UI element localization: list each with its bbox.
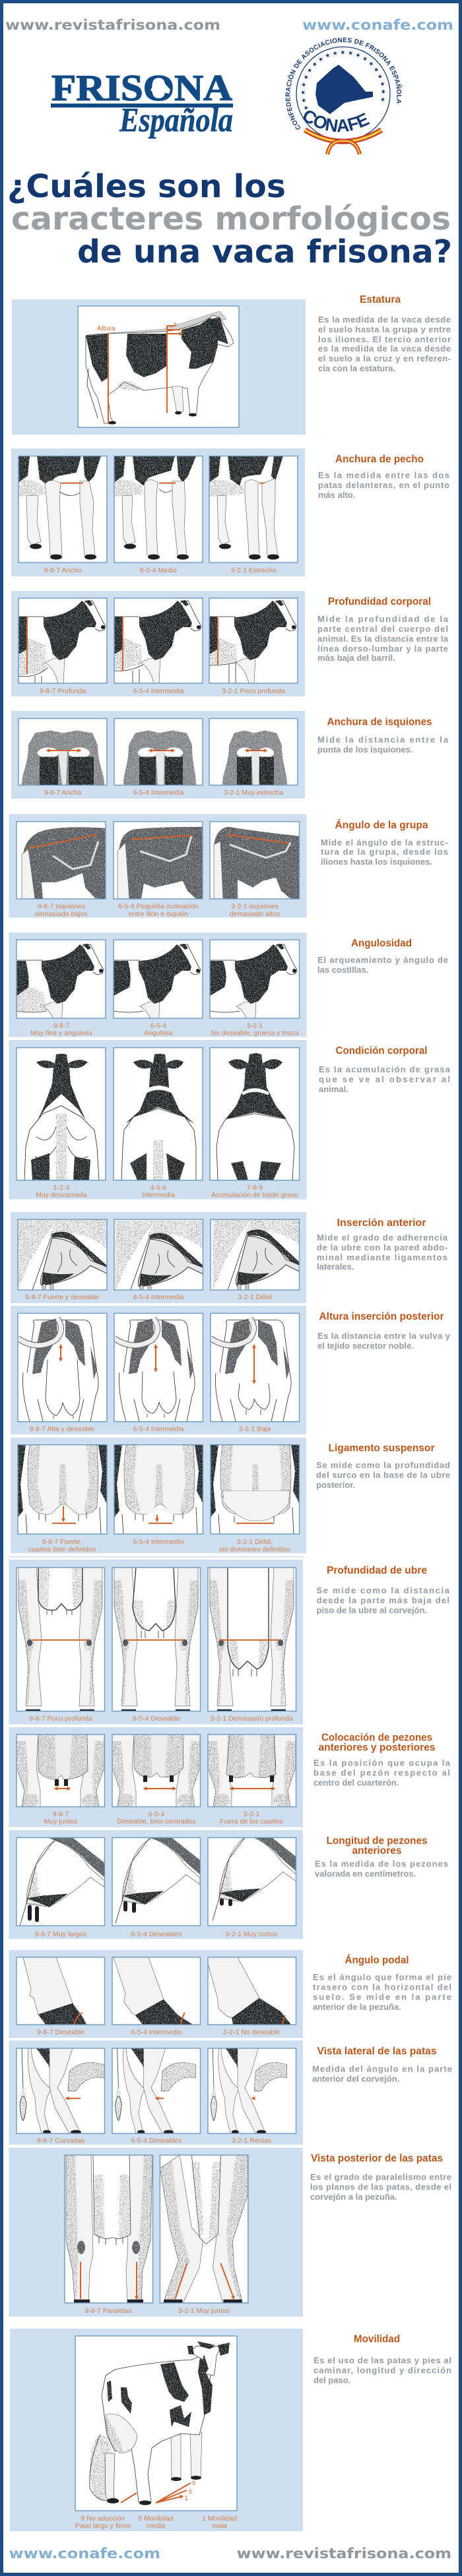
captions: 6-5-4 Pequeña inclinación — [118, 902, 199, 910]
captions: Muy juntos — [44, 1818, 77, 1825]
main title — [7, 168, 452, 270]
captions — [44, 789, 283, 797]
captions: Intermedia — [142, 1191, 175, 1199]
illustration: medio — [114, 456, 203, 563]
captions: Angulosa — [144, 1029, 173, 1037]
illustration: alta y deseable — [18, 1313, 107, 1422]
description: es la medida de la vaca desde — [318, 344, 451, 353]
illustration: estatura: 9 — [174, 322, 177, 328]
main title: ¿Cuáles son los — [7, 168, 286, 205]
heading: Profundidad de ubre — [327, 1565, 427, 1576]
heading: Anchura de isquiones — [327, 716, 432, 728]
captions — [35, 1930, 277, 1938]
captions: 5 Movilidad — [138, 2515, 174, 2523]
description: Se mide como la distancia — [317, 1585, 450, 1595]
captions: 3-2-1 Débil — [238, 1293, 272, 1301]
captions: 6-5-4 — [148, 1810, 164, 1818]
description: anterior del corvejón. — [312, 2073, 399, 2084]
illustration: fuerte y deseable — [18, 1219, 107, 1290]
logo: CONAFE: CONFEDERACIÓN DE ASOCIACIONES DE FRISONA ESPAÑOLA — [285, 38, 403, 129]
illustration: ancho — [18, 456, 107, 563]
heading: Ángulo de la grupa — [335, 818, 428, 831]
description: Es el uso de las patas y pies al — [314, 2356, 451, 2365]
illustration: pequeña inclinación — [114, 822, 203, 899]
heading: Inserción anterior — [337, 1217, 426, 1229]
description: el suelo hasta la grupa y entre — [318, 324, 451, 334]
description — [317, 735, 449, 754]
captions — [40, 687, 285, 695]
captions — [25, 1293, 272, 1301]
captions: sin divisiones definidas — [219, 1546, 290, 1554]
description: Es el grado de paralelismo entre — [310, 2172, 451, 2182]
heading: Ligamento suspensor — [329, 1443, 434, 1454]
captions: demasiado altos — [230, 910, 280, 918]
illustration: muy juntas — [160, 2155, 248, 2303]
description — [314, 2356, 451, 2385]
heading: Angulosidad — [351, 938, 412, 949]
heading — [326, 1835, 428, 1856]
illustration: deseables — [112, 1835, 201, 1926]
illustration: fuera de los cuartos — [208, 1734, 296, 1807]
captions: 6-5-4 Intermedia — [133, 1293, 184, 1301]
description: Se mide como la profundidad — [316, 1460, 450, 1470]
panel: Profundidad de ubre — [9, 1560, 450, 1725]
illustration: muy cortos — [208, 1832, 297, 1926]
illustration: baja — [211, 1313, 300, 1422]
description — [317, 1331, 451, 1351]
captions: Fuera de los cuartos — [220, 1818, 283, 1825]
description: suelo. Se mide en la parte — [313, 1992, 451, 2002]
captions: 9-8-7 Fuerte y deseable — [25, 1293, 99, 1301]
illustration: poco profunda — [209, 598, 298, 683]
header website: revista frisona: www.revistafrisona.com — [5, 17, 220, 33]
captions: 1-2-3 — [53, 1184, 69, 1192]
captions — [30, 1425, 271, 1433]
heading: anteriores — [352, 1845, 402, 1856]
description: las costillas. — [317, 965, 368, 975]
panel: Colocación de pezones — [9, 1727, 451, 1827]
description: Mide el grado de adherencia — [317, 1233, 448, 1242]
description: centro del cuarterón. — [314, 1778, 399, 1787]
captions: 3-2-1 Demasiado profunda — [211, 1715, 293, 1723]
illustration: cow walking — [75, 2336, 237, 2511]
captions: Muy fina y angulosa — [30, 1029, 92, 1037]
panel: Vista posterior de las patas — [9, 2148, 451, 2317]
panel: Vista lateral de las patas — [9, 2040, 452, 2145]
description: que se ve al observar al — [319, 1074, 450, 1084]
illustration: ancha — [18, 719, 107, 785]
illustration: deseable — [112, 1568, 201, 1711]
captions: 3-2-1 isquiones — [231, 902, 279, 910]
panel: Anchura de pecho — [11, 448, 449, 576]
illustration: intermedia — [114, 1219, 205, 1291]
logo: CONAFE: CONAFE — [304, 111, 370, 132]
description: el suelo a la cruz y en referen- — [318, 353, 451, 363]
description: Es la posición que ocupa la — [314, 1758, 451, 1767]
illustration: muy fina y angulosa — [16, 940, 106, 1027]
captions: 6-5-4 Intermedio — [131, 2029, 182, 2037]
heading — [318, 1732, 436, 1753]
captions: 3-2-1 Estrecho — [231, 567, 277, 574]
description: más baja del barril. — [317, 653, 395, 663]
panel: Ángulo podal — [9, 1950, 451, 2038]
captions: 9-8-7 Curvadas — [37, 2137, 84, 2145]
captions: 9-8-7 — [53, 1810, 69, 1818]
description: laterales. — [317, 1262, 354, 1272]
captions: 3-2-1 Muy estrecha — [224, 789, 283, 797]
illustration: intermedia — [114, 1048, 203, 1181]
description: los planos de las patas, desde el — [310, 2182, 451, 2192]
captions: 6-5-4 Medio — [140, 567, 177, 574]
panel: Inserción anterior — [11, 1212, 448, 1303]
illustration: intermedio — [112, 1957, 201, 2025]
captions: 6-5-4 Deseable — [133, 1715, 180, 1723]
description: el tejido secretor noble. — [317, 1341, 414, 1351]
panel: Altura inserción posterior — [11, 1306, 451, 1434]
illustration: intermedio — [114, 1445, 203, 1535]
description: Es la distancia entre la vulva y — [317, 1331, 451, 1341]
captions — [30, 1022, 299, 1037]
captions — [44, 567, 277, 574]
description — [321, 838, 448, 867]
captions — [37, 2137, 271, 2145]
heading: Colocación de pezones — [321, 1732, 432, 1744]
description: Es la medida entre las dos — [318, 470, 449, 480]
illustration: estatura: Altura — [97, 324, 116, 332]
illustration: deseable — [112, 1734, 201, 1807]
captions: 3-2-1 Poco profunda — [222, 687, 285, 695]
captions: 9-8-7 Paralelas — [84, 2307, 132, 2315]
illustration: isquiones bajos — [16, 822, 106, 899]
description: iliones hasta los isquiones. — [321, 857, 432, 867]
panel: Movilidad — [10, 2329, 451, 2531]
panel: Estatura — [12, 294, 451, 435]
captions: Paso largo y firme — [75, 2522, 131, 2530]
illustration: angulosa — [114, 940, 203, 1027]
captions: 3-2-1 Débil, — [237, 1538, 273, 1546]
panel: Angulosidad — [9, 933, 448, 1037]
heading: Profundidad corporal — [328, 596, 431, 607]
heading: Movilidad — [354, 2333, 400, 2345]
description: Es la acumulación de grasa — [319, 1064, 451, 1074]
description — [310, 2172, 451, 2201]
captions — [36, 1184, 298, 1199]
captions — [28, 1538, 290, 1554]
captions — [37, 2029, 280, 2037]
footer website: conafe: www.conafe.com — [9, 2546, 160, 2561]
description: anterior de la pezuña. — [313, 2002, 401, 2011]
heading: Anchura de pecho — [335, 454, 424, 465]
description: corvejón a la pezuña. — [310, 2192, 397, 2201]
illustration: gruesa y tosca — [210, 940, 300, 1027]
description — [316, 1460, 450, 1490]
captions — [84, 2307, 230, 2315]
illustration: rectas — [208, 2048, 296, 2134]
description: base del pezón respecto al — [314, 1767, 450, 1778]
logo: Frisona Española — [51, 68, 233, 139]
description: Es la medida de los pezones — [315, 1858, 448, 1869]
description: animal. — [319, 1084, 348, 1094]
captions: 9-8-7 Profunda — [40, 687, 86, 695]
captions: 3-2-1 — [247, 1022, 263, 1030]
panel: Longitud de pezones — [9, 1830, 448, 1939]
illustration: poco profunda — [16, 1568, 104, 1711]
description: caminar, longitud y dirección — [314, 2365, 451, 2376]
description — [317, 955, 448, 975]
captions: 6-5-4 Intermedia — [133, 1425, 184, 1433]
illustration: profunda — [18, 598, 107, 683]
heading: Vista lateral de las patas — [317, 2046, 437, 2057]
captions: 9-8-7 Deseable — [37, 2029, 84, 2037]
heading: Longitud de pezones — [326, 1835, 428, 1847]
illustration: estatura: 7 — [182, 327, 185, 333]
captions: 6-5-4 Intermedia — [133, 687, 184, 695]
illustration: muy juntos — [16, 1734, 104, 1807]
illustration: cow walking: 5 — [189, 2488, 192, 2495]
captions: 6-5-4 — [150, 1022, 166, 1030]
captions: 9-8-7 — [53, 1022, 69, 1030]
captions: cuartos bien definidos — [28, 1546, 96, 1554]
logo: Frisona Española: FRISONA — [51, 68, 233, 109]
description: patas delanteras, en el punto — [318, 480, 449, 490]
description: animal. Es la distancia entre la — [317, 634, 449, 644]
illustration: intermedia — [114, 1313, 203, 1422]
description — [314, 1758, 451, 1787]
main title: caracteres morfológicos — [11, 200, 451, 237]
description: línea dorso-lumbar y la parte — [317, 644, 448, 654]
description — [317, 614, 449, 663]
captions: 1 Movilidad — [202, 2515, 237, 2523]
panel: Ligamento suspensor — [11, 1438, 450, 1554]
captions: 9 No aducción — [81, 2515, 125, 2523]
description: Mide el ángulo de la estruc- — [321, 838, 448, 847]
captions: 6-5-4 Deseables — [131, 1930, 182, 1938]
description: valorada en centímetros. — [315, 1869, 416, 1878]
panel: Ángulo de la grupa — [9, 814, 448, 918]
captions — [44, 1810, 283, 1825]
description: Mide la distancia entre la — [317, 735, 449, 745]
captions — [35, 902, 280, 918]
description: cia con la estatura. — [318, 363, 395, 373]
panel: Anchura de isquiones — [11, 711, 449, 799]
illustration: acumulación de tejido graso — [210, 1048, 300, 1181]
illustration: deseables — [112, 2048, 201, 2134]
captions: 3-2-1 Baja — [239, 1425, 271, 1433]
logo: Frisona Española: Española — [119, 102, 233, 139]
heading: Ángulo podal — [345, 1953, 409, 1966]
description: trasero con la horizontal del — [313, 1982, 451, 1992]
heading: Vista posterior de las patas — [311, 2153, 443, 2164]
illustration: demasiado profunda — [208, 1568, 296, 1711]
header website: conafe: www.conafe.com — [302, 17, 453, 33]
captions: entre ilión e isquión — [129, 910, 188, 918]
description: más alto. — [318, 490, 355, 500]
illustration: cow walking: 9 — [192, 2480, 195, 2486]
description — [317, 1585, 450, 1615]
description — [315, 1858, 448, 1878]
captions: 7-8-9 — [247, 1184, 263, 1192]
illustration: estatura — [78, 306, 239, 427]
captions: No deseable, gruesa y tosca — [211, 1029, 299, 1037]
captions: Muy descarnada — [36, 1191, 87, 1199]
illustration: intermedia — [114, 719, 203, 785]
captions: 3-2-1 Muy cortos — [226, 1930, 277, 1938]
illustration: fuerte — [18, 1445, 107, 1535]
logo: CONAFE: ★★★★★★★★★★★★★★★★★★★★ — [301, 50, 385, 110]
illustration: débil — [211, 1445, 300, 1535]
captions: 9-8-7 Ancha — [44, 789, 81, 797]
illustration: estrecho — [209, 456, 298, 563]
description — [312, 2064, 452, 2084]
illustration: no deseable — [208, 1957, 296, 2025]
heading: anteriores y posteriores — [318, 1742, 436, 1753]
captions: 3-2-1 — [244, 1810, 259, 1818]
captions: 6-5-4 Deseables — [131, 2137, 182, 2145]
description: del paso. — [314, 2376, 350, 2385]
description — [313, 1972, 451, 2011]
panel: Condición corporal — [9, 1040, 451, 1199]
captions: 6-5-4 Intermedio — [133, 1538, 184, 1546]
heading: Altura inserción posterior — [319, 1311, 444, 1322]
captions: mala — [212, 2522, 227, 2530]
illustration: curvadas — [16, 2048, 104, 2134]
description: tura de la grupa, desde los — [321, 847, 448, 857]
illustration: muy descarnada — [16, 1048, 106, 1181]
description: del surco en la base de la ubre — [316, 1470, 450, 1480]
illustration: muy largos — [16, 1837, 104, 1926]
captions — [75, 2515, 237, 2530]
captions: 6-5-4 Intermedia — [133, 789, 184, 797]
description: piso de la ubre al corvejón. — [317, 1605, 427, 1615]
illustration: deseable — [16, 1957, 104, 2025]
captions: 9-8-7 Muy largos — [35, 1930, 86, 1938]
captions: 9-8-7 Isquiones — [38, 902, 85, 910]
description: punta de los isquiones. — [317, 745, 412, 754]
captions: 3-2-1 No deseable — [223, 2029, 280, 2037]
description: minal mediante ligamentos — [317, 1252, 447, 1262]
description: El arqueamiento y ángulo de — [317, 955, 448, 965]
description: de la ubre con la pared abdo- — [317, 1242, 447, 1252]
description: Medida del ángulo en la parte — [312, 2064, 452, 2073]
captions: 9-8-7 Ancho — [44, 567, 81, 574]
captions: Deseable, bien centrados — [117, 1818, 196, 1825]
main title: de una vaca frisona? — [77, 233, 452, 270]
panel: Profundidad corporal — [11, 591, 449, 696]
description: Mide la profundidad de la — [317, 614, 449, 624]
description: Es el ángulo que forma el pie — [313, 1972, 451, 1982]
description — [319, 1064, 451, 1094]
heading: Condición corporal — [335, 1045, 428, 1057]
description — [318, 470, 449, 500]
description: parte central del cuerpo del — [317, 624, 448, 634]
captions: demasiado bajos — [35, 910, 88, 918]
description — [317, 1233, 448, 1272]
description: Es la medida de la vaca desde — [318, 315, 451, 324]
description — [318, 315, 451, 373]
captions: 3-2-1 Rectas — [232, 2137, 271, 2145]
illustration: débil — [211, 1217, 302, 1290]
captions: 3-2-1 Muy juntas — [178, 2307, 230, 2315]
footer website: revista frisona: www.revistafrisona.com — [236, 2546, 451, 2561]
captions: media — [147, 2522, 165, 2530]
illustration: muy estrecha — [209, 719, 298, 785]
heading: Estatura — [360, 294, 401, 305]
captions: 4-5-6 — [150, 1184, 166, 1192]
illustration: intermedia — [114, 598, 203, 683]
illustration: cow walking: 1 — [185, 2495, 188, 2501]
captions: 9-8-7 Alta y deseable — [30, 1425, 94, 1433]
illustration: paralelas — [65, 2155, 153, 2303]
captions: Acumulación de tejido graso — [211, 1191, 298, 1199]
captions: 9-8-7 Fuerte, — [42, 1538, 82, 1546]
captions — [29, 1715, 293, 1723]
description: desde la parte más baja del — [317, 1595, 449, 1605]
description: los iliones. El tercio anterior — [318, 334, 451, 344]
description: posterior. — [316, 1480, 355, 1490]
illustration: isquiones altos — [210, 822, 300, 899]
captions: 9-8-7 Poco profunda — [29, 1715, 92, 1723]
